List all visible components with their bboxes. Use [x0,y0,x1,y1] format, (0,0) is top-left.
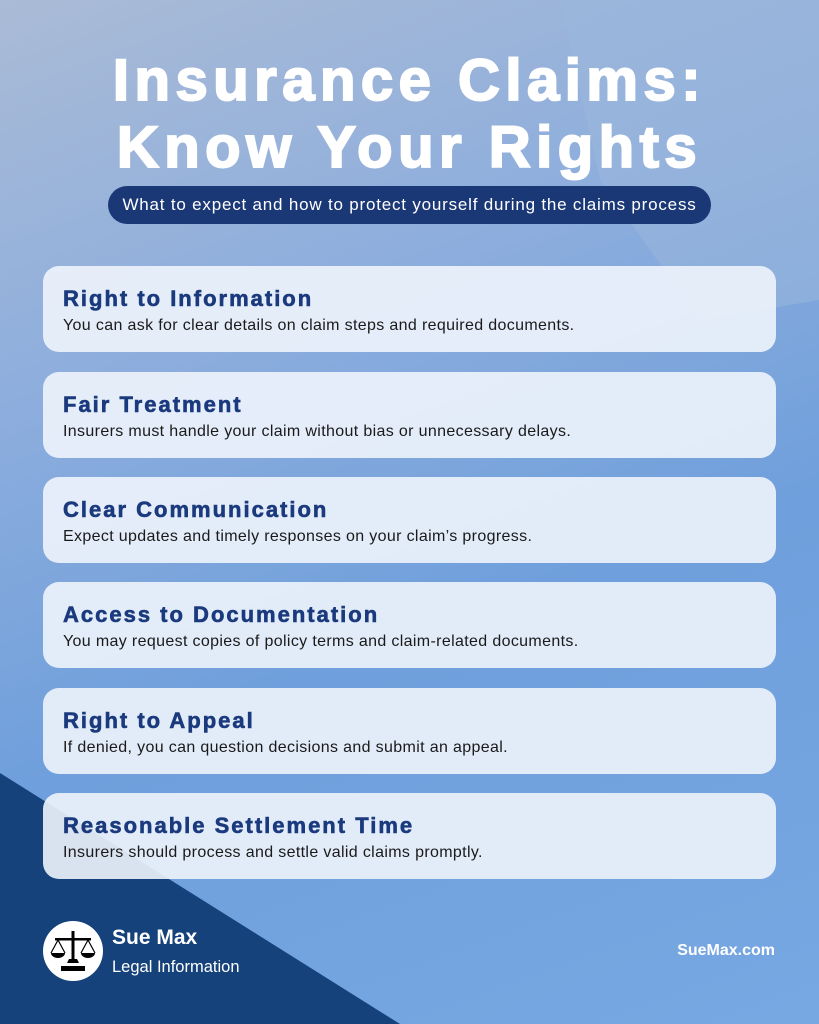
card: right to appeal [43,688,776,774]
card: access to documentation: Access to Documentation [63,602,379,627]
card: right to information [43,266,776,352]
card: clear communication: Clear Communication [63,497,328,522]
card: access to documentation: You may request copies of policy terms and claim-related documents. [63,633,579,650]
card: right to appeal: If denied, you can question decisions and submit an appeal. [63,739,508,756]
card: clear communication: Expect updates and timely responses on your claim’s progress. [63,528,532,545]
card: reasonable settlement time [43,793,776,879]
title [113,48,706,180]
logo [43,921,240,981]
icon: scales [43,921,103,981]
brand text: Sue Max [112,926,197,949]
subtitle pill: What to expect and how to protect yourself during the claims process [122,195,697,214]
card: fair treatment: Fair Treatment [63,392,243,417]
card: fair treatment: Insurers must handle your claim without bias or unnecessary delays. [63,423,571,440]
card: right to appeal: Right to Appeal [63,708,255,733]
subtitle pill [108,186,711,224]
website: SueMax.com [677,942,775,959]
card: reasonable settlement time: Reasonable Settlement Time [63,813,414,838]
title: Insurance Claims: [113,48,706,113]
logo: Legal Information [112,958,240,976]
title: Know Your Rights [117,115,702,180]
card: access to documentation [43,582,776,668]
card: clear communication [43,477,776,563]
card: right to information: Right to Information [63,286,313,311]
card: right to information: You can ask for clear details on claim steps and required documents. [63,317,574,334]
card: reasonable settlement time: Insurers should process and settle valid claims promptly. [63,844,483,861]
card: fair treatment [43,372,776,458]
